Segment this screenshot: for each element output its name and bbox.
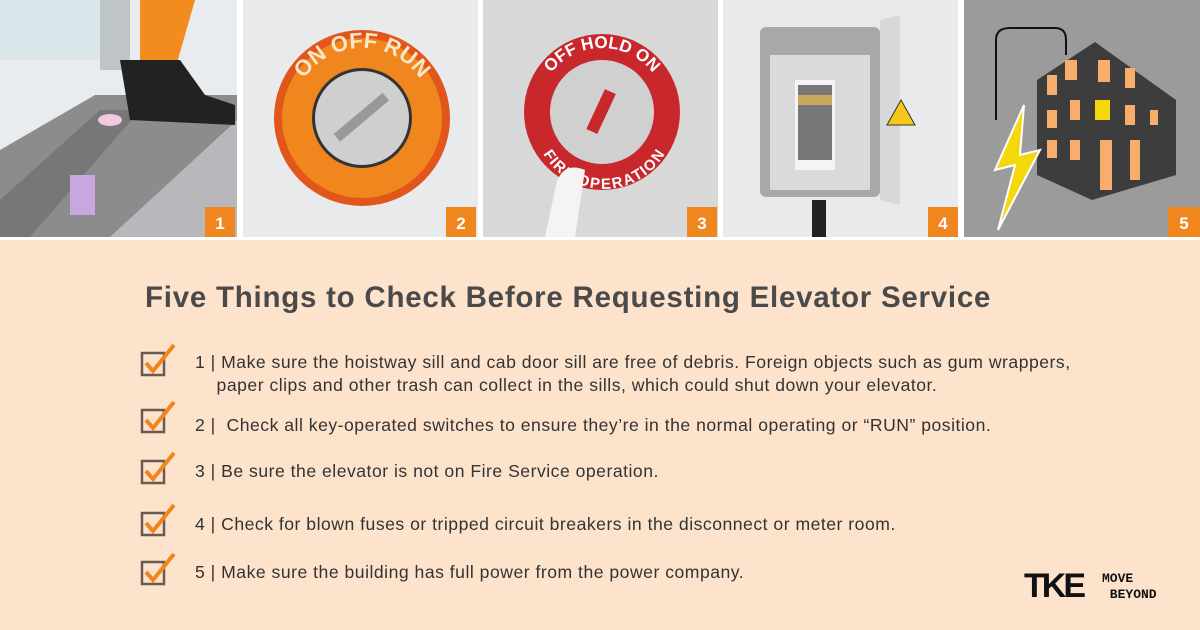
checklist item 1: paper clips and other trash can collect in the sills, which could shut down your elevator. [217, 375, 937, 395]
checklist item 2 [140, 400, 991, 435]
checklist item 2: 2 | Check all key-operated switches to ensure they’re in the normal operating or “RUN” position. [195, 415, 991, 435]
checklist item 5: 5 | Make sure the building has full power from the power company. [195, 562, 744, 582]
panel 3: fire switch: FIRE OPERATION [544, 149, 664, 189]
checklist item 4: 4 | Check for blown fuses or tripped circuit breakers in the disconnect or meter room. [195, 514, 896, 534]
logo: TKE move beyond: BEYOND [1110, 587, 1157, 602]
checklist item 5 [140, 552, 744, 586]
number badges: 3 [697, 214, 707, 233]
title: Five Things to Check Before Requesting Elevator Service [145, 281, 991, 314]
panel 3: fire switch: OFF HOLD ON [544, 36, 661, 72]
checklist item 1 [140, 344, 1071, 395]
number badges: 4 [938, 214, 948, 233]
number badges: 1 [215, 214, 225, 233]
number badges: 5 [1179, 214, 1189, 233]
top image strip [0, 0, 1200, 240]
number badges [205, 207, 1200, 237]
panel 2: key switch: ON OFF RUN [295, 32, 432, 78]
checklist item 4 [140, 504, 896, 536]
panel 5: building power [964, 0, 1200, 237]
logo: TKE move beyond: TKE [1024, 567, 1083, 605]
panel 1: sill debris [0, 0, 237, 237]
panel 4: breaker box [723, 0, 958, 237]
checklist item 1: 1 | Make sure the hoistway sill and cab door sill are free of debris. Foreign objects such as gum wrappers, [195, 352, 1071, 372]
checklist item 3 [140, 452, 659, 484]
number badges: 2 [456, 214, 466, 233]
logo: TKE move beyond: MOVE [1102, 571, 1133, 586]
logo: TKE move beyond [1024, 567, 1157, 605]
panel 2: key switch [243, 0, 478, 237]
checklist item 3: 3 | Be sure the elevator is not on Fire Service operation. [195, 461, 659, 481]
panel 3: fire switch [483, 0, 718, 237]
